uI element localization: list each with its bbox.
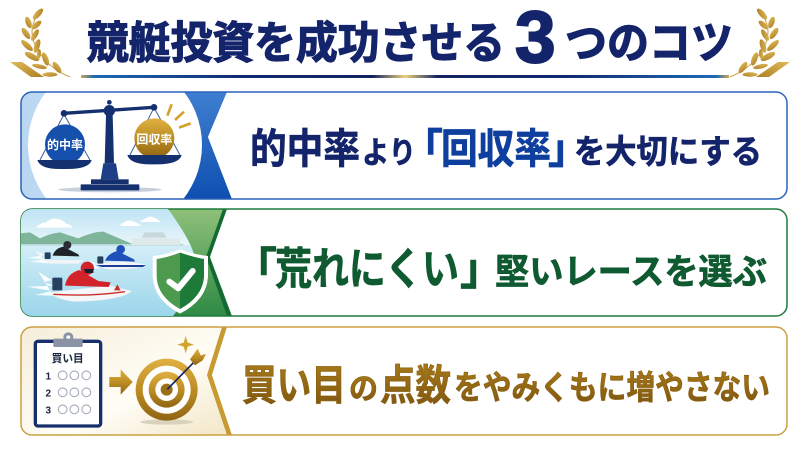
tip 1 text: 回収率 — [441, 126, 551, 172]
icon: balance scale — [37, 100, 191, 192]
tip 1 text: 」 — [548, 126, 589, 172]
icon: clipboard: 2 — [46, 388, 52, 399]
tip 1 text: 「 — [402, 126, 443, 172]
icon: balance scale: 的中率 — [47, 137, 83, 152]
icon: clipboard: 買い目 — [52, 353, 84, 365]
icon: clipboard: 1 — [46, 371, 52, 382]
tip 1 text: より — [362, 137, 416, 170]
panel: tip 2 — [20, 209, 787, 317]
tip 1 text — [250, 126, 762, 172]
icon: clipboard: 3 — [46, 405, 52, 416]
icon: clipboard — [35, 332, 101, 426]
tip 2 text: 堅いレースを選ぶ — [495, 253, 767, 292]
tip 3 text: の — [349, 373, 378, 406]
title — [87, 0, 733, 78]
tip 1 text: 的中率 — [250, 126, 360, 172]
illustration: boat race — [20, 209, 201, 317]
panel: tip 1 — [20, 91, 788, 200]
icon: arrow — [109, 369, 133, 395]
icon: shield — [153, 249, 208, 314]
tip 1 text: を大切にする — [574, 133, 762, 170]
title: 競艇投資を成功させる — [87, 19, 505, 68]
tip 2 text — [233, 245, 767, 294]
tip 3 text: 買い目 — [242, 362, 346, 409]
tip 3 text — [242, 362, 770, 409]
title: つのコツ — [565, 19, 733, 68]
icon: target with dart — [136, 336, 206, 425]
panel: tip 3 — [21, 327, 787, 435]
tip 2 text: 」 — [460, 245, 504, 294]
title underline — [81, 75, 729, 78]
tip 3 text: 点数 — [380, 362, 451, 409]
tip 2 text: 荒れにくい — [275, 245, 459, 294]
icon: right laurel — [730, 7, 790, 77]
icon: left laurel — [10, 7, 70, 77]
tip 2 text: 「 — [233, 245, 277, 294]
icon: balance scale: 回収率 — [136, 131, 172, 146]
